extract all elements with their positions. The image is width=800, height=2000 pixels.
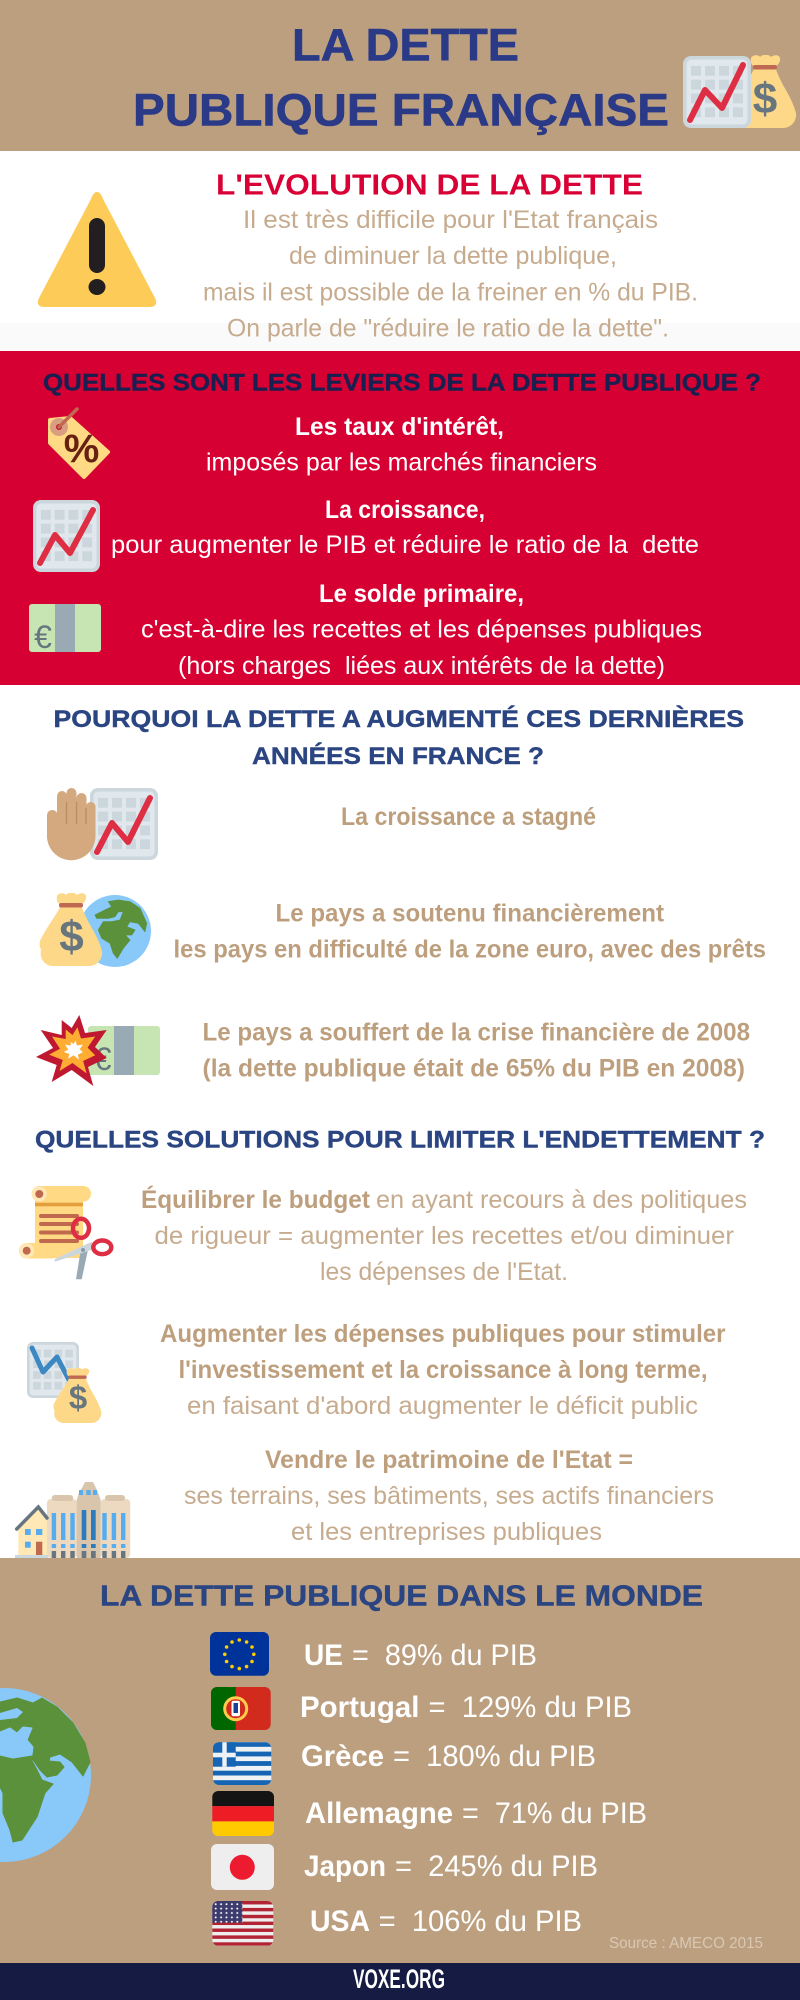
heading: why: POURQUOI LA DETTE A AUGMENTÉ CES DERNIÈRES: [54, 705, 744, 733]
text block: evolution: [203, 206, 698, 343]
flag: Greece: [213, 1742, 272, 1785]
solution: stimulus spending: l'investissement et la croissance à long terme,: [178, 1356, 708, 1384]
reason: stagnant growth: La croissance a stagné: [341, 803, 596, 831]
solution: stimulus spending: Augmenter les dépenses publiques pour stimuler: [160, 1320, 726, 1348]
reason: euro zone loans: les pays en difficulté de la zone euro, avec des prêts: [174, 936, 766, 964]
icon: scroll and scissors: [19, 1186, 111, 1279]
icon: warning triangle: [38, 192, 156, 307]
stat: Portugal: = 129% du PIB: [428, 1691, 632, 1724]
icon: falling chart and money bag: $: [69, 1379, 87, 1416]
panel: solutions: [15, 1127, 765, 1558]
flag: Portugal: [211, 1687, 271, 1730]
lever: growth: [111, 496, 699, 559]
flag: EU: [210, 1632, 269, 1676]
stat: EU: = 89% du PIB: [352, 1639, 537, 1672]
icon: banknote: €: [34, 619, 52, 655]
icon: money bag and rising chart: $: [753, 74, 777, 124]
solution: balance the budget: les dépenses de l'Etat.: [320, 1258, 568, 1286]
header panel: [0, 0, 800, 151]
stat: Germany: [305, 1797, 647, 1830]
lever: interest rates: imposés par les marchés financiers: [206, 449, 597, 477]
flag: Japan: [211, 1844, 274, 1890]
solution: sell state assets: ses terrains, ses bâtiments, ses actifs financiers: [184, 1482, 714, 1510]
lever: primary balance: Le solde primaire,: [319, 580, 524, 608]
icon: rising chart: [33, 500, 100, 572]
solution: balance the budget: [141, 1185, 747, 1286]
text block: evolution: On parle de "réduire le ratio de la dette".: [227, 315, 669, 343]
lever: growth: pour augmenter le PIB et réduire le ratio de la dette: [111, 531, 699, 559]
stat: Germany: Allemagne: [305, 1797, 453, 1830]
lever: interest rates: [206, 413, 597, 477]
icon: falling chart and money bag: [27, 1342, 101, 1423]
reason: euro zone loans: [174, 900, 766, 964]
reason: euro zone loans: Le pays a soutenu financièrement: [276, 900, 665, 928]
panel: levers: [0, 351, 800, 685]
stat: EU: UE: [304, 1639, 343, 1672]
heading: levers: QUELLES SONT LES LEVIERS DE LA DETTE PUBLIQUE ?: [43, 370, 761, 397]
icon: money bag and globe: $: [59, 912, 84, 962]
solution: sell state assets: Vendre le patrimoine de l'Etat =: [265, 1446, 633, 1474]
stat: Japan: [304, 1850, 598, 1883]
reason: 2008 crisis: (la dette publique était de 65% du PIB en 2008): [202, 1055, 745, 1083]
icon: explosion and banknote: [36, 1015, 160, 1086]
text block: evolution: mais il est possible de la freiner en % du PIB.: [203, 279, 698, 307]
title: [133, 20, 669, 135]
flag: Germany: [212, 1791, 274, 1836]
icon: explosion and banknote: €: [94, 1041, 112, 1077]
stat: Japan: = 245% du PIB: [395, 1850, 598, 1883]
stat: USA: USA: [310, 1905, 370, 1938]
lever: primary balance: c'est-à-dire les recettes et les dépenses publiques: [141, 616, 702, 644]
icon: percent tag: %: [64, 427, 99, 471]
lever: growth: La croissance,: [325, 496, 485, 524]
stat: Greece: = 180% du PIB: [393, 1740, 596, 1773]
stat: Germany: = 71% du PIB: [462, 1797, 647, 1830]
icon: buildings: [15, 1482, 130, 1558]
stat: Greece: [301, 1740, 596, 1773]
lever: interest rates: Les taux d'intérêt,: [295, 413, 504, 441]
icon: money bag and globe: [40, 893, 151, 967]
flag: USA: [212, 1901, 274, 1946]
heading: evolution: L'EVOLUTION DE LA DETTE: [216, 169, 643, 201]
icon: globe: [0, 1688, 91, 1862]
panel: debt in the world: [0, 1558, 800, 1963]
heading: why: ANNÉES EN FRANCE ?: [252, 742, 544, 770]
lever: primary balance: [141, 580, 702, 680]
icon: hand stopping chart: [47, 788, 158, 860]
stat: Greece: Grèce: [301, 1740, 384, 1773]
stat: Portugal: Portugal: [300, 1691, 419, 1724]
heading: solutions: QUELLES SOLUTIONS POUR LIMITER L'ENDETTEMENT ?: [35, 1127, 765, 1154]
stat: Japan: Japon: [304, 1850, 386, 1883]
title: LA DETTE: [292, 20, 519, 71]
heading: why: [54, 705, 744, 770]
footer brand: VOXE.ORG: [353, 1964, 445, 1994]
footer: [0, 1963, 800, 2000]
solution: sell state assets: [184, 1446, 714, 1546]
text block: evolution: de diminuer la dette publique,: [289, 242, 617, 270]
icon: money bag and rising chart: [683, 55, 796, 128]
stat: Portugal: [300, 1691, 632, 1724]
reason: 2008 crisis: [202, 1019, 750, 1083]
source note: Source : AMECO 2015: [609, 1935, 763, 1952]
solution: balance the budget: de rigueur = augmenter les recettes et/ou diminuer: [154, 1222, 734, 1250]
icon: banknote: [29, 604, 101, 655]
panel: why the debt rose: [36, 705, 766, 1086]
solution: balance the budget: Équilibrer le budget: [141, 1185, 371, 1214]
stat: USA: = 106% du PIB: [379, 1905, 582, 1938]
solution: balance the budget: en ayant recours à des politiques: [376, 1186, 747, 1214]
title: PUBLIQUE FRANÇAISE: [133, 84, 669, 135]
icon: percent tag: [50, 409, 108, 477]
panel: evolution of the debt: [0, 151, 800, 351]
heading: world: LA DETTE PUBLIQUE DANS LE MONDE: [100, 1581, 703, 1613]
lever: primary balance: (hors charges liées aux intérêts de la dette): [178, 652, 665, 680]
reason: 2008 crisis: Le pays a souffert de la crise financière de 2008: [202, 1019, 750, 1047]
solution: sell state assets: et les entreprises publiques: [291, 1518, 602, 1546]
solution: stimulus spending: [160, 1320, 726, 1420]
solution: stimulus spending: en faisant d'abord augmenter le déficit public: [187, 1392, 698, 1420]
text block: evolution: Il est très difficile pour l'Etat français: [243, 206, 658, 234]
